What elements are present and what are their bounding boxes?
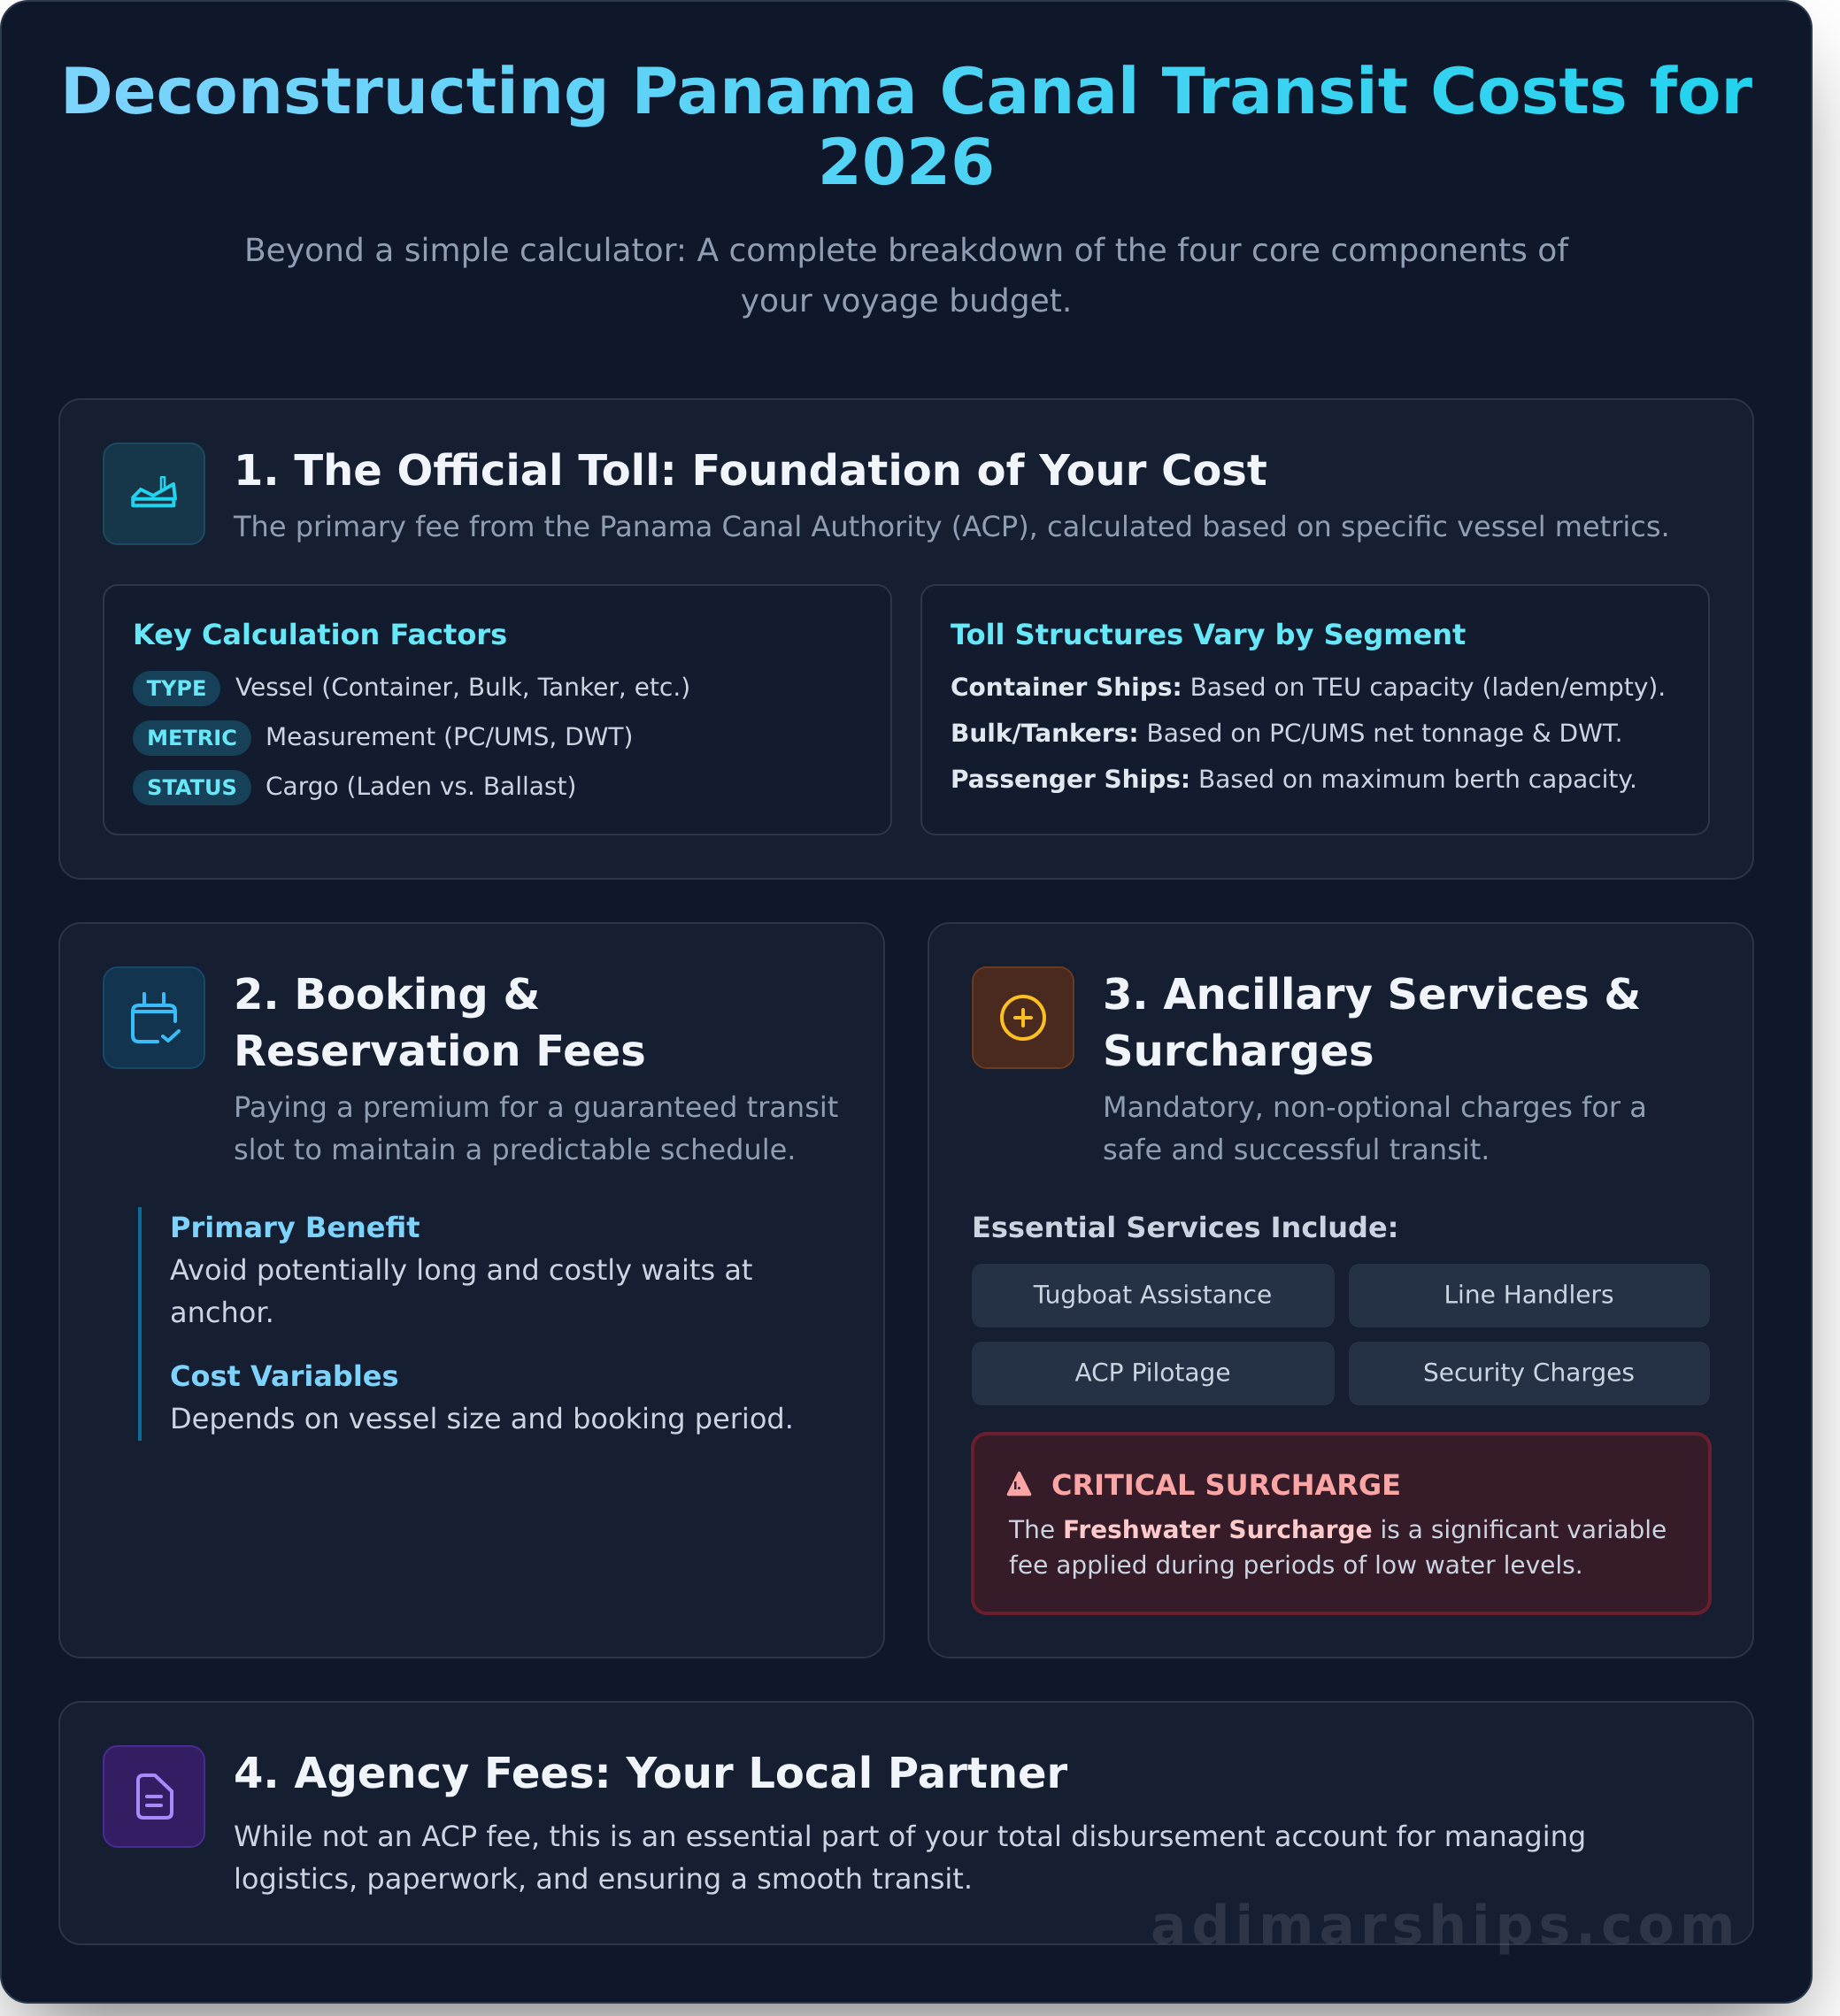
tag row: type: Vessel (Container, Bulk, Tanker, etc.) bbox=[235, 673, 690, 702]
chip: security charges: Security Charges bbox=[1423, 1358, 1635, 1388]
chip: line handlers: Line Handlers bbox=[1444, 1280, 1614, 1310]
icon: document bbox=[104, 1746, 204, 1847]
heading: booking fees: Reservation Fees bbox=[234, 1027, 646, 1076]
tag row: metric: Measurement (PC/UMS, DWT) bbox=[266, 722, 633, 751]
sub-panel: key calculation factors bbox=[104, 585, 891, 835]
chip: line handlers bbox=[1349, 1264, 1710, 1327]
tag row: type bbox=[133, 671, 690, 706]
icon: plus circle bbox=[973, 967, 1074, 1068]
callout: benefit and cost variables: Cost Variables bbox=[170, 1359, 399, 1393]
callout: critical surcharge: The Freshwater Surcharge is a significant variable bbox=[1008, 1515, 1667, 1544]
tag row: metric bbox=[133, 720, 633, 756]
description: ancillary services: Mandatory, non-optional charges for a bbox=[1103, 1090, 1647, 1124]
title: Deconstructing Panama Canal Transit Costs for bbox=[60, 54, 1752, 128]
icon: warning triangle bbox=[1009, 1473, 1030, 1494]
sub-panel: toll structures: Bulk/Tankers: Based on PC/UMS net tonnage & DWT. bbox=[951, 719, 1622, 748]
callout: critical surcharge: fee applied during periods of low water levels. bbox=[1009, 1550, 1583, 1580]
callout: critical surcharge bbox=[973, 1434, 1710, 1613]
chip: tugboat assistance: Tugboat Assistance bbox=[1033, 1280, 1272, 1310]
chip: security charges bbox=[1349, 1342, 1710, 1405]
sub-panel: toll structures bbox=[921, 585, 1709, 835]
subtitle: your voyage budget. bbox=[741, 283, 1072, 319]
tag row: status bbox=[133, 770, 576, 805]
callout: benefit and cost variables: Depends on vessel size and booking period. bbox=[170, 1402, 794, 1435]
chip: tugboat assistance bbox=[972, 1264, 1335, 1327]
panel: 4. agency fees bbox=[59, 1702, 1753, 1944]
icon: calendar check bbox=[104, 967, 204, 1068]
icon: ship bbox=[104, 443, 204, 544]
chip: acp pilotage bbox=[972, 1342, 1335, 1405]
heading: agency fees: 4. Agency Fees: Your Local Partner bbox=[234, 1749, 1068, 1798]
sub-panel: toll structures: Toll Structures Vary by Segment bbox=[951, 618, 1466, 651]
description: agency fees bbox=[234, 1820, 1586, 1896]
description: ancillary services bbox=[1103, 1090, 1647, 1166]
panel: 2. booking fees bbox=[59, 923, 884, 1658]
tag row: type: TYPE bbox=[147, 676, 206, 701]
tag row: metric: METRIC bbox=[147, 726, 237, 750]
description: official toll: The primary fee from the Panama Canal Authority (ACP), calculated based on specific vessel metrics. bbox=[233, 510, 1670, 543]
subtitle bbox=[244, 233, 1569, 319]
sub-heading: essential services: Essential Services Include: bbox=[972, 1211, 1398, 1244]
description: booking fees: slot to maintain a predictable schedule. bbox=[234, 1133, 796, 1166]
callout: benefit and cost variables: anchor. bbox=[170, 1296, 274, 1329]
tag row: status: STATUS bbox=[147, 775, 237, 800]
sub-panel: toll structures: Container Ships: Based on TEU capacity (laden/empty). bbox=[951, 673, 1666, 702]
description: booking fees: Paying a premium for a guaranteed transit bbox=[234, 1090, 838, 1124]
chip: acp pilotage: ACP Pilotage bbox=[1074, 1358, 1231, 1388]
description: ancillary services: safe and successful transit. bbox=[1103, 1133, 1490, 1166]
heading: booking fees bbox=[234, 970, 646, 1076]
callout: benefit and cost variables bbox=[138, 1207, 794, 1441]
callout: critical surcharge: CRITICAL SURCHARGE bbox=[1051, 1468, 1401, 1502]
panel: 3. ancillary services bbox=[928, 923, 1753, 1658]
heading: ancillary services bbox=[1103, 970, 1641, 1076]
watermark: adimarships.com bbox=[1151, 1895, 1740, 1957]
description: booking fees bbox=[234, 1090, 838, 1166]
heading: ancillary services: 3. Ancillary Services & bbox=[1103, 970, 1641, 1020]
heading: booking fees: 2. Booking & bbox=[234, 970, 540, 1020]
description: agency fees: While not an ACP fee, this is an essential part of your total disbursement account for managing bbox=[234, 1820, 1586, 1853]
title bbox=[60, 54, 1752, 199]
sub-panel: toll structures: Passenger Ships: Based on maximum berth capacity. bbox=[951, 765, 1637, 794]
description: agency fees: logistics, paperwork, and ensuring a smooth transit. bbox=[234, 1862, 973, 1896]
sub-panel: key calculation factors: Key Calculation Factors bbox=[133, 618, 507, 651]
heading: ancillary services: Surcharges bbox=[1103, 1027, 1374, 1076]
tag row: status: Cargo (Laden vs. Ballast) bbox=[266, 772, 576, 801]
heading: official toll: 1. The Official Toll: Foundation of Your Cost bbox=[234, 446, 1267, 496]
subtitle: Beyond a simple calculator: A complete breakdown of the four core components of bbox=[244, 233, 1569, 269]
panel: 1. official toll bbox=[59, 399, 1753, 879]
callout: benefit and cost variables: Avoid potentially long and costly waits at bbox=[170, 1253, 752, 1287]
title: 2026 bbox=[818, 125, 995, 199]
callout: benefit and cost variables: Primary Benefit bbox=[170, 1211, 420, 1244]
